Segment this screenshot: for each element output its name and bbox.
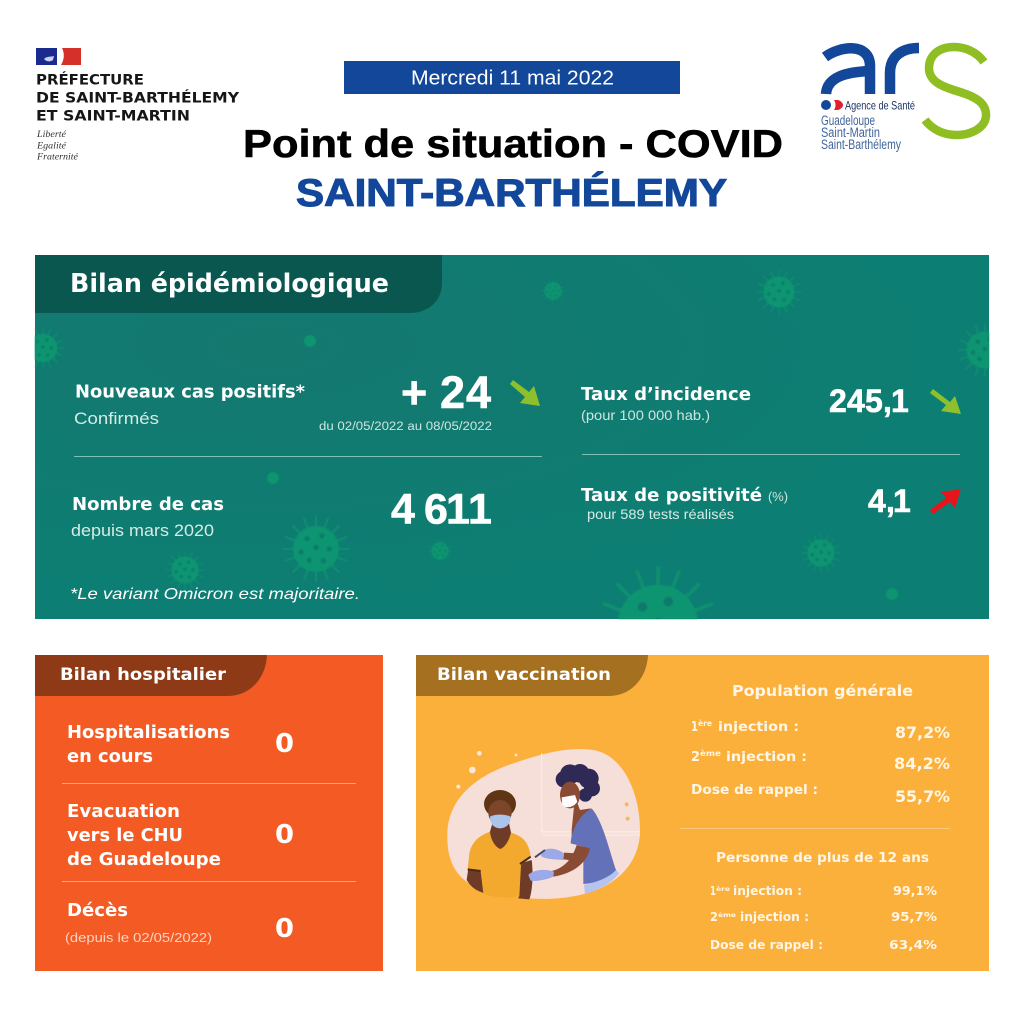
stat: taux de positivité: pour 589 tests réalisés bbox=[587, 507, 734, 522]
title: Point de situation - COVID bbox=[243, 123, 783, 166]
heading tab bbox=[35, 255, 442, 313]
stat: nouveaux cas positifs: du 02/05/2022 au 08/05/2022 bbox=[319, 421, 492, 433]
stat: taux d'incidence bbox=[581, 383, 909, 423]
row: 1ère injection bbox=[691, 719, 950, 742]
stat: taux d'incidence: (pour 100 000 hab.) bbox=[581, 407, 710, 423]
heading: personne de plus de 12 ans: Personne de plus de 12 ans bbox=[716, 851, 929, 866]
illustration: vaccination scene bbox=[447, 749, 640, 899]
text: territories bbox=[821, 113, 901, 152]
logo: ARS bbox=[821, 47, 986, 152]
virus decorations bbox=[23, 270, 1011, 682]
stat: taux d'incidence: 245,1 bbox=[829, 383, 909, 419]
row: 2ème injection: ème bbox=[700, 749, 721, 758]
row: 1ère injection: injection : bbox=[718, 719, 799, 735]
text: territories: Saint-Barthélemy bbox=[821, 137, 901, 152]
stat: taux de positivité: Taux de positivité bbox=[581, 486, 762, 506]
text: devise: Fraternité bbox=[36, 152, 79, 162]
icon: Marianne flag bbox=[36, 48, 81, 65]
subtitle: SAINT-BARTHÉLEMY bbox=[296, 171, 727, 215]
panel: bilan hospitalier bbox=[35, 655, 383, 971]
panel: bilan vaccination bbox=[416, 655, 989, 971]
row: 2ème injection 12 ans: 2 bbox=[710, 910, 718, 924]
stat: taux de positivité: (%) bbox=[768, 490, 788, 504]
stat: hospitalisations: Hospitalisations bbox=[67, 722, 230, 743]
heading tab: Bilan vaccination bbox=[437, 665, 611, 685]
note: variant Omicron: *Le variant Omicron est majoritaire. bbox=[70, 586, 360, 603]
date banner bbox=[344, 61, 680, 94]
stat: nombre de cas: Nombre de cas bbox=[72, 495, 224, 515]
stat: taux d'incidence: Taux d’incidence bbox=[581, 385, 751, 405]
date banner: Mercredi 11 mai 2022 bbox=[411, 68, 614, 90]
row: 1ère injection 12 ans: 99,1% bbox=[893, 883, 937, 898]
heading tab: Bilan hospitalier bbox=[60, 665, 227, 685]
text: devise: Egalité bbox=[36, 142, 67, 152]
text: devise: Liberté bbox=[36, 130, 67, 140]
row: 2ème injection 12 ans: injection : bbox=[740, 910, 809, 924]
stat: décès: Décès bbox=[67, 900, 128, 921]
text: préfecture name: ET SAINT-MARTIN bbox=[36, 108, 190, 124]
heading tab bbox=[35, 655, 267, 696]
patient bbox=[467, 790, 533, 899]
row: 2ème injection 12 ans: ème bbox=[718, 911, 737, 919]
row: dose de rappel 12 ans bbox=[710, 937, 938, 952]
heading tab bbox=[416, 655, 648, 696]
icon: arrow down green bbox=[930, 389, 961, 414]
heading: population générale: Population générale bbox=[732, 682, 913, 700]
row: dose de rappel 12 ans: Dose de rappel : bbox=[710, 938, 823, 952]
stat: hospitalisations: 0 bbox=[275, 729, 294, 759]
stat: évacuation: de Guadeloupe bbox=[67, 849, 221, 870]
text: territories: Saint-Martin bbox=[821, 125, 880, 140]
heading tab: Bilan épidémiologique bbox=[70, 269, 389, 299]
row: dose de rappel: Dose de rappel : bbox=[691, 782, 818, 798]
row: 2ème injection: 2 bbox=[691, 749, 700, 765]
row: 2ème injection: injection : bbox=[726, 749, 807, 765]
stat: taux de positivité: 4,1 bbox=[868, 483, 911, 519]
stat: hospitalisations bbox=[67, 722, 294, 767]
stat: évacuation: Evacuation bbox=[67, 801, 180, 822]
row: 1ère injection: 1 bbox=[691, 719, 698, 735]
blob background bbox=[447, 749, 640, 899]
text: préfecture name bbox=[36, 72, 240, 124]
panel: bilan épidémiologique bbox=[23, 255, 1011, 682]
stat: décès bbox=[65, 900, 294, 945]
stat: nouveaux cas positifs: + 24 bbox=[401, 367, 491, 418]
text: préfecture name: PRÉFECTURE bbox=[36, 72, 144, 88]
stat: nombre de cas: 4 611 bbox=[391, 486, 492, 534]
row: 1ère injection: ère bbox=[698, 719, 712, 728]
stat: décès: (depuis le 02/05/2022) bbox=[65, 930, 212, 945]
text: Agence de Santé: Agence de Santé bbox=[845, 98, 915, 112]
row: 1ère injection 12 ans bbox=[710, 883, 937, 898]
stat: évacuation: vers le CHU bbox=[67, 825, 183, 846]
nurse bbox=[528, 764, 619, 894]
stat: nouveaux cas positifs: Confirmés bbox=[74, 409, 159, 428]
row: 1ère injection 12 ans: injection : bbox=[733, 884, 802, 898]
icon: arrow down green bbox=[510, 380, 540, 406]
text: devise bbox=[36, 130, 79, 162]
stat: évacuation: 0 bbox=[275, 820, 294, 850]
stat: taux de positivité bbox=[581, 483, 911, 522]
stat: évacuation bbox=[67, 801, 294, 870]
row: 2ème injection 12 ans bbox=[710, 909, 937, 924]
row: dose de rappel: 55,7% bbox=[895, 787, 950, 806]
text: territories: Guadeloupe bbox=[821, 113, 875, 128]
icon: arrow up red bbox=[930, 489, 961, 514]
row: 1ère injection 12 ans: 1 bbox=[710, 884, 716, 898]
stat: nouveaux cas positifs bbox=[74, 367, 492, 433]
stat: nombre de cas bbox=[71, 486, 492, 540]
row: 2ème injection bbox=[691, 749, 950, 773]
icon: ars letters bbox=[825, 47, 986, 135]
text: préfecture name: DE SAINT-BARTHÉLEMY bbox=[36, 90, 240, 106]
row: 2ème injection 12 ans: 95,7% bbox=[891, 909, 937, 924]
row: 1ère injection: 87,2% bbox=[895, 723, 950, 742]
logo: Préfecture de Saint-Barthélemy et Saint-Martin bbox=[36, 48, 240, 162]
row: dose de rappel bbox=[691, 782, 950, 806]
icon: blue and red dots bbox=[821, 100, 843, 110]
stat: nouveaux cas positifs: Nouveaux cas positifs* bbox=[75, 382, 305, 402]
stat: décès: 0 bbox=[275, 914, 294, 944]
row: dose de rappel 12 ans: 63,4% bbox=[889, 937, 938, 952]
row: 1ère injection 12 ans: ère bbox=[716, 885, 731, 893]
stat: nombre de cas: depuis mars 2020 bbox=[71, 521, 214, 540]
row: 2ème injection: 84,2% bbox=[894, 754, 950, 773]
stat: hospitalisations: en cours bbox=[67, 746, 153, 767]
